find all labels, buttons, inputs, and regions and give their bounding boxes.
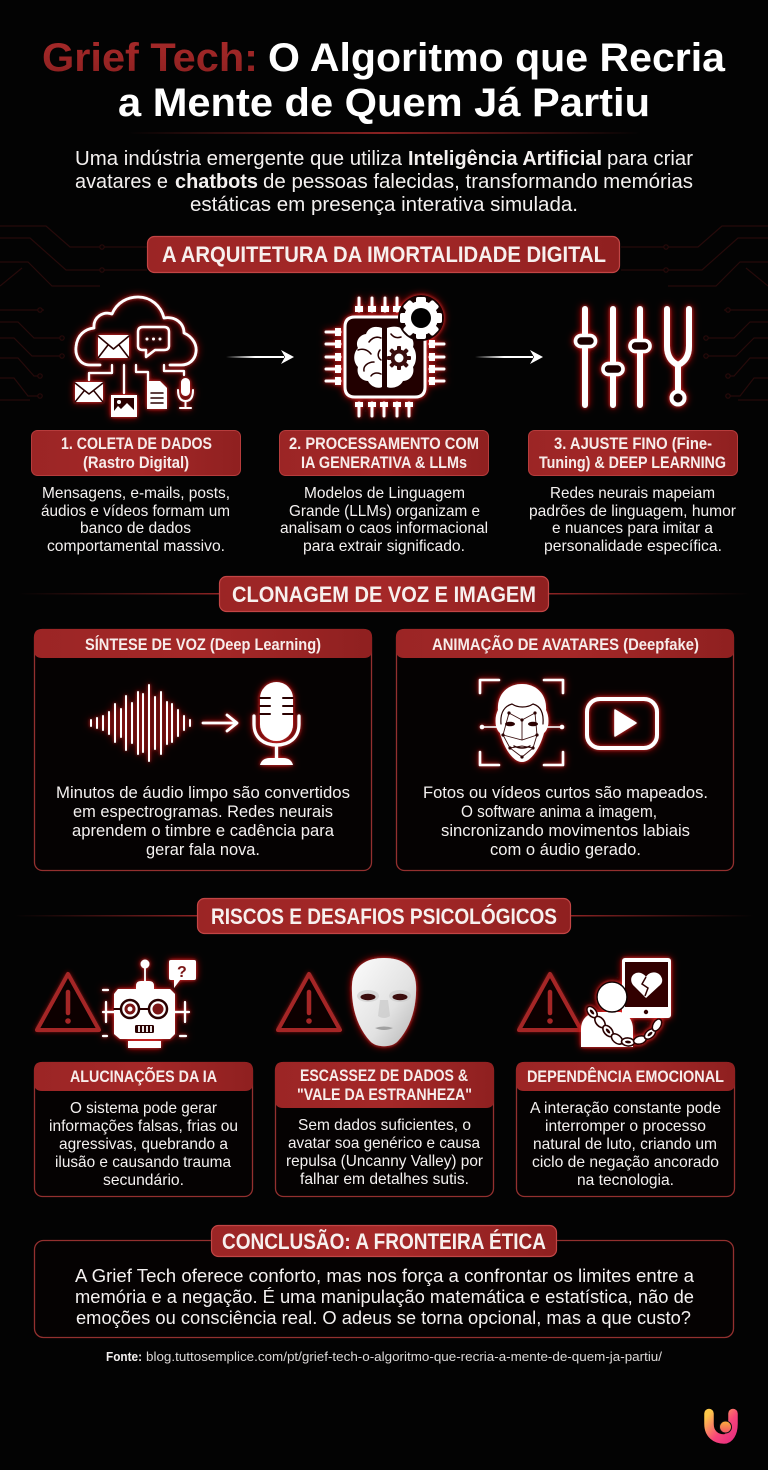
panel: emotional dependence: A interação constante pode xyxy=(530,1100,721,1117)
title xyxy=(42,36,726,125)
section heading: psychological risks xyxy=(14,898,754,934)
icon: person chained to tablet xyxy=(581,958,671,1047)
subtitle: de pessoas falecidas, transformando memórias xyxy=(263,170,693,193)
step 1: comportamental massivo. xyxy=(47,538,225,555)
step 3 xyxy=(528,430,738,555)
panel: voice synthesis: gerar fala nova. xyxy=(146,840,260,859)
section heading: voice and image cloning: CLONAGEM DE VOZ E IMAGEM xyxy=(232,582,536,607)
title: a Mente de Quem Já Partiu xyxy=(118,81,650,125)
step 2: para extrair significado. xyxy=(303,538,465,555)
step 3: padrões de linguagem, humor xyxy=(529,503,737,520)
panel: AI hallucinations: ALUCINAÇÕES DA IA xyxy=(70,1066,217,1086)
source line: blog.tuttosemplice.com/pt/grief-tech-o-algoritmo-que-recria-a-mente-de-quem-ja-partiu/ xyxy=(146,1350,663,1364)
icon: data cloud xyxy=(75,297,196,417)
arrow xyxy=(226,350,294,364)
step 1: 1. COLETA DE DADOS xyxy=(61,435,212,453)
panel: avatar animation xyxy=(396,629,734,870)
panel: data scarcity and uncanny valley: Sem dados suficientes, o xyxy=(298,1117,471,1134)
title: Grief Tech: xyxy=(42,36,258,80)
panel: emotional dependence: ciclo de negação ancorado xyxy=(532,1154,719,1171)
step 2: analisam o caos informacional xyxy=(280,520,488,537)
panel: voice synthesis xyxy=(34,629,372,870)
panel: conclusion: emoções ou consciência real. O adeus se torna opcional, mas a que custo? xyxy=(76,1307,691,1328)
panel: AI hallucinations xyxy=(34,1062,253,1196)
subtitle xyxy=(75,147,693,216)
subtitle: Uma indústria emergente que utiliza xyxy=(75,147,403,170)
subtitle: Inteligência Artificial xyxy=(408,147,602,170)
panel: data scarcity and uncanny valley: "VALE DA ESTRANHEZA" xyxy=(297,1086,472,1104)
background circuit traces, left xyxy=(0,226,147,400)
step 3: 3. AJUSTE FINO (Fine- xyxy=(554,435,712,453)
icon: uncanny mask xyxy=(352,958,416,1046)
panel: data scarcity and uncanny valley: repulsa (Uncanny Valley) por xyxy=(286,1153,484,1170)
panel: conclusion: A Grief Tech oferece conforto, mas nos força a confrontar os limites entre a xyxy=(75,1265,695,1286)
panel: AI hallucinations: agressivas, quebrando a xyxy=(59,1136,228,1153)
panel: data scarcity and uncanny valley: ESCASSEZ DE DADOS & xyxy=(300,1067,468,1085)
panel: AI hallucinations: informações falsas, frias ou xyxy=(49,1118,238,1135)
section heading: psychological risks: RISCOS E DESAFIOS PSICOLÓGICOS xyxy=(211,904,557,929)
icon: malfunctioning robot: ? xyxy=(177,964,187,981)
icon: AI chip with brain and gear xyxy=(326,295,444,416)
section heading: voice and image cloning xyxy=(18,576,750,612)
step 2: Grande (LLMs) organizam e xyxy=(289,503,480,520)
panel: avatar animation: sincronizando movimentos labiais xyxy=(441,821,690,840)
step 2 xyxy=(280,430,488,555)
title: O Algoritmo que Recria xyxy=(268,36,726,80)
arrow xyxy=(475,350,543,364)
step 1: áudios e vídeos formam um xyxy=(41,503,230,520)
section heading: architecture: A ARQUITETURA DA IMORTALIDADE DIGITAL xyxy=(162,242,606,267)
panel: avatar animation: ANIMAÇÃO DE AVATARES (Deepfake) xyxy=(432,634,699,654)
section heading: architecture xyxy=(148,236,620,272)
title underline xyxy=(128,132,640,134)
icon: fine-tuning sliders and fork xyxy=(576,309,689,405)
subtitle: chatbots xyxy=(175,170,258,193)
panel: avatar animation: O software anima a imagem, xyxy=(461,802,657,821)
icon: warning triangle xyxy=(37,974,99,1030)
step 1 xyxy=(32,430,240,555)
subtitle: para criar xyxy=(607,147,693,170)
step 3: personalidade específica. xyxy=(544,538,722,555)
panel: data scarcity and uncanny valley: avatar soa genérico e causa xyxy=(288,1135,480,1152)
panel: data scarcity and uncanny valley xyxy=(275,1062,494,1196)
step 2: Modelos de Linguagem xyxy=(304,485,465,502)
panel: avatar animation: Fotos ou vídeos curtos são mapeados. xyxy=(423,783,708,802)
icon: face scan and play button xyxy=(480,680,657,765)
panel: conclusion: CONCLUSÃO: A FRONTEIRA ÉTICA xyxy=(222,1229,546,1254)
step 3: e nuances para imitar a xyxy=(552,520,713,537)
background circuit traces, right xyxy=(621,226,768,400)
panel: voice synthesis: Minutos de áudio limpo são convertidos xyxy=(56,783,350,802)
panel: conclusion: memória e a negação. É uma manipulação matemática e estatística, não de xyxy=(75,1286,694,1307)
step 2: IA GENERATIVA & LLMs xyxy=(301,454,467,472)
panel: emotional dependence: natural de luto, criando um xyxy=(533,1136,717,1153)
panel: emotional dependence: DEPENDÊNCIA EMOCIONAL xyxy=(527,1067,724,1086)
source line: Fonte: xyxy=(106,1350,142,1364)
panel: AI hallucinations: ilusão e causando trauma xyxy=(55,1154,231,1171)
panel: voice synthesis: em espectrogramas. Redes neurais xyxy=(73,802,333,821)
icon: warning triangle xyxy=(278,974,340,1030)
panel: voice synthesis: aprendem o timbre e cadência para xyxy=(72,821,335,840)
panel: voice synthesis: SÍNTESE DE VOZ (Deep Learning) xyxy=(85,635,321,654)
step 1: (Rastro Digital) xyxy=(83,454,189,472)
logo xyxy=(709,1414,733,1439)
subtitle: avatares e xyxy=(75,170,168,193)
step 3: Redes neurais mapeiam xyxy=(550,485,715,502)
step 1: Mensagens, e-mails, posts, xyxy=(42,485,230,502)
panel: emotional dependence xyxy=(516,1062,735,1196)
panel: data scarcity and uncanny valley: falhar em detalhes sutis. xyxy=(300,1171,469,1188)
panel: emotional dependence: interromper o processo xyxy=(545,1118,706,1135)
icon: malfunctioning robot xyxy=(103,960,196,1048)
step 2: 2. PROCESSAMENTO COM xyxy=(289,435,479,453)
icon: waveform to microphone xyxy=(91,682,299,765)
step 1: banco de dados xyxy=(80,520,191,537)
panel: avatar animation: com o áudio gerado. xyxy=(490,840,641,859)
subtitle: estáticas em presença interativa simulada. xyxy=(190,193,578,216)
panel: conclusion xyxy=(34,1226,734,1338)
icon: warning triangle xyxy=(519,974,581,1030)
panel: AI hallucinations: O sistema pode gerar xyxy=(70,1100,218,1117)
panel: AI hallucinations: secundário. xyxy=(103,1172,184,1189)
panel: emotional dependence: na tecnologia. xyxy=(577,1172,674,1189)
step 3: Tuning) & DEEP LEARNING xyxy=(539,454,726,472)
